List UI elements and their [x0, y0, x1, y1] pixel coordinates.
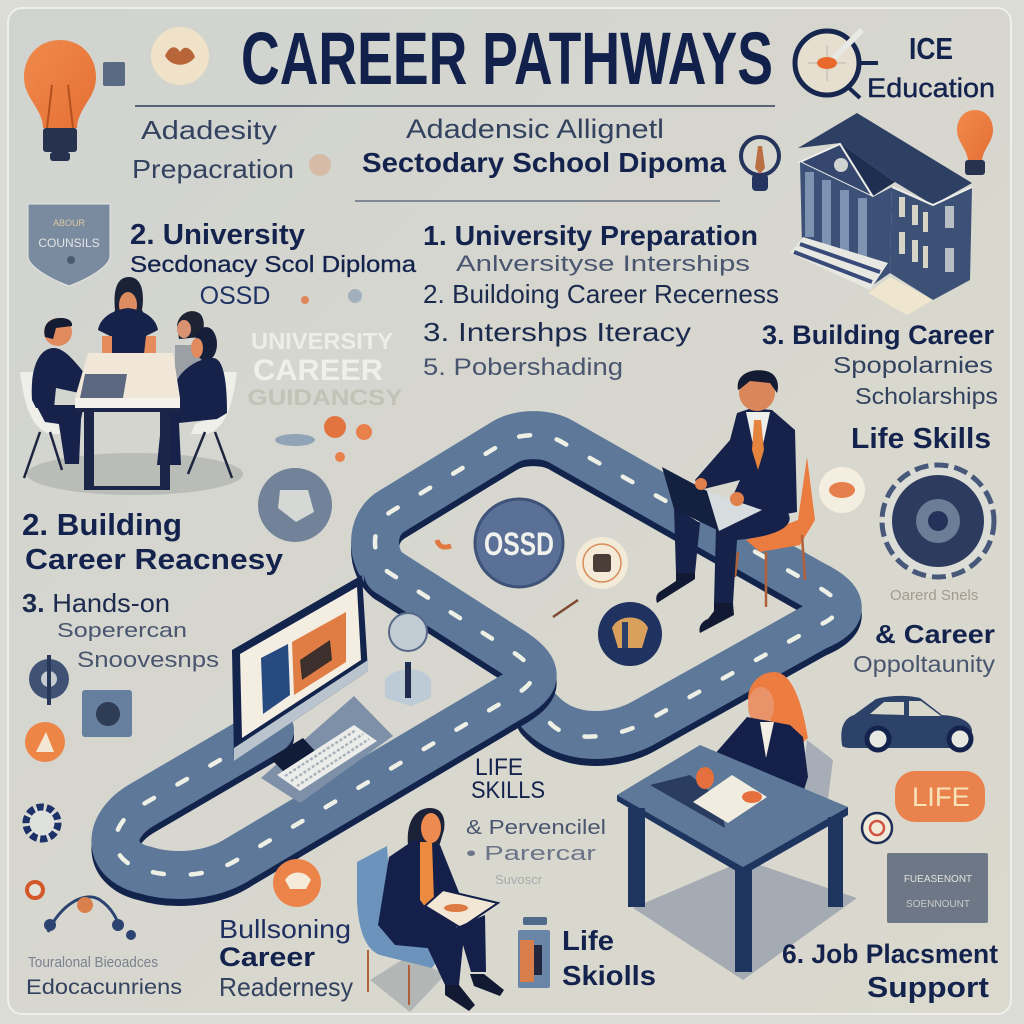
text: academic aligned [362, 114, 726, 178]
text: university diploma: Secdonacy Scol Diploma [130, 251, 416, 277]
icon: shield badge: COUNSILS [38, 236, 100, 250]
text: building career opportunities right: Spopolarnies [833, 352, 993, 378]
road [115, 435, 838, 882]
text: university career guidance [248, 328, 403, 410]
text: educational bottom left [26, 954, 182, 999]
text: life skills centre: • Parercar [466, 843, 596, 865]
text: career opportunity: & Career [875, 619, 995, 649]
text: life skills centre: Suvoscr [495, 872, 543, 887]
text: life skills bottom [562, 925, 656, 991]
person: seated woman with notebook [357, 808, 504, 1012]
text: university diploma: OSSD [200, 282, 270, 310]
text: academic preparation: Adadesity [141, 115, 277, 145]
icon: gear medallion [882, 465, 994, 577]
text: academic aligned: Adadensic Allignetl [406, 114, 664, 144]
decorative scatter road centre [437, 540, 578, 617]
text: university diploma [130, 219, 416, 310]
icon: compass top right [795, 30, 878, 98]
text: life skills bottom: Skiolls [562, 960, 656, 991]
scattered small icons bottom left [44, 897, 136, 940]
text: numbered list: 2. Buildoing Career Recerness [423, 279, 779, 309]
text: academic aligned: Sectodary School Dipoma [362, 147, 726, 178]
text: life skills bottom: Life [562, 925, 614, 956]
icon: small jar [518, 917, 550, 988]
text: university diploma: 2. University [130, 219, 305, 251]
illustration: computer monitor [232, 575, 393, 803]
text: bullsoning career readiness: Bullsoning [219, 914, 351, 944]
text: ICE Education: Education [867, 73, 995, 103]
text: numbered list: 5. Pobershading [423, 354, 623, 381]
text: university career guidance: CAREER [253, 354, 383, 387]
icon: light bulb with tie [741, 137, 779, 191]
text: building career opportunities right [762, 320, 998, 409]
text: life skills centre: LIFE [475, 754, 523, 781]
icon: round badge cream [576, 537, 628, 589]
text: hands-on: 3. Hands-on [22, 588, 170, 618]
icon: shield badge [28, 204, 110, 286]
text: educational bottom left: Touralonal Bieoadces [28, 954, 158, 971]
text: career opportunity: Oppoltaunity [853, 651, 996, 677]
text: building career opportunities right: 3. Building Career [762, 320, 994, 350]
icon: sign board [887, 853, 988, 923]
text: building career opportunities right: Scholarships [855, 383, 998, 409]
text: ICE Education: ICE [909, 31, 953, 66]
text: numbered list: 3. Intershps Iteracy [423, 317, 691, 347]
text: life skills centre: & Pervencilel [466, 817, 606, 839]
icon: life button [895, 771, 985, 822]
icon: phone badge [273, 859, 321, 907]
text: bullsoning career readiness: Career [219, 942, 316, 972]
icon: OSSD badge: OSSD [484, 526, 554, 562]
person: woman at desk [617, 672, 857, 980]
faint text right: Oarerd Snels [890, 587, 978, 604]
text: academic preparation [132, 115, 294, 184]
left side icons [25, 655, 132, 898]
icon: light bulb right [957, 110, 993, 175]
text: university career guidance: GUIDANCSY [248, 385, 403, 410]
text: hands-on: Soperercan [57, 620, 187, 642]
text: bullsoning career readiness [219, 914, 353, 1002]
text: job placement support [782, 939, 998, 1004]
icon: university building [790, 113, 972, 315]
icon: OSSD badge [475, 499, 563, 587]
icon: small orange figure [309, 154, 331, 176]
text: life skills centre: SKILLS [471, 777, 545, 804]
text: academic preparation: Prepacration [132, 154, 294, 184]
person: man with laptop [656, 370, 815, 633]
text: life skills heading right: Life Skills [851, 423, 991, 455]
text: career opportunity [853, 619, 996, 677]
text: building career readiness: 2. Building [22, 507, 182, 542]
text: numbered list: 1. University Preparation [423, 220, 758, 251]
icon: car [841, 696, 972, 750]
text: life skills centre [466, 754, 606, 887]
text: job placement support: Support [867, 972, 989, 1004]
icon: life button: LIFE [912, 782, 970, 812]
text: numbered list: Anlversityse Interships [456, 251, 750, 276]
decorative scatter center left [275, 289, 372, 462]
text: building career readiness [22, 507, 283, 576]
text: building career readiness: Career Reacnesy [25, 544, 283, 576]
icon: round medallion left [258, 468, 332, 542]
text: university career guidance: UNIVERSITY [251, 328, 393, 354]
icon: orange ring [862, 813, 892, 843]
text: hands-on [22, 588, 219, 672]
icon: round dark badge [598, 602, 662, 666]
text: hands-on: Snoovesnps [77, 647, 219, 672]
icon: small square badge [103, 62, 125, 86]
icon: round badge top [151, 27, 209, 85]
illustration: team around a table [20, 277, 243, 495]
text: numbered list [423, 220, 779, 381]
icon: sign board: FUEASENONT [904, 874, 972, 885]
icon: shield badge: ABOUR [53, 218, 85, 228]
icon: sign board: SOENNOUNT [906, 899, 970, 910]
title: CAREER PATHWAYS [241, 17, 773, 100]
text: educational bottom left: Edocacunriens [26, 976, 182, 999]
icon: light bulb left [24, 40, 96, 161]
text: job placement support: 6. Job Placsment [782, 939, 998, 969]
icon: lamp object near monitor [385, 613, 431, 706]
text: ICE Education [867, 31, 995, 103]
icon: round cream badge right [819, 467, 865, 513]
text: bullsoning career readiness: Readernesy [219, 972, 353, 1002]
